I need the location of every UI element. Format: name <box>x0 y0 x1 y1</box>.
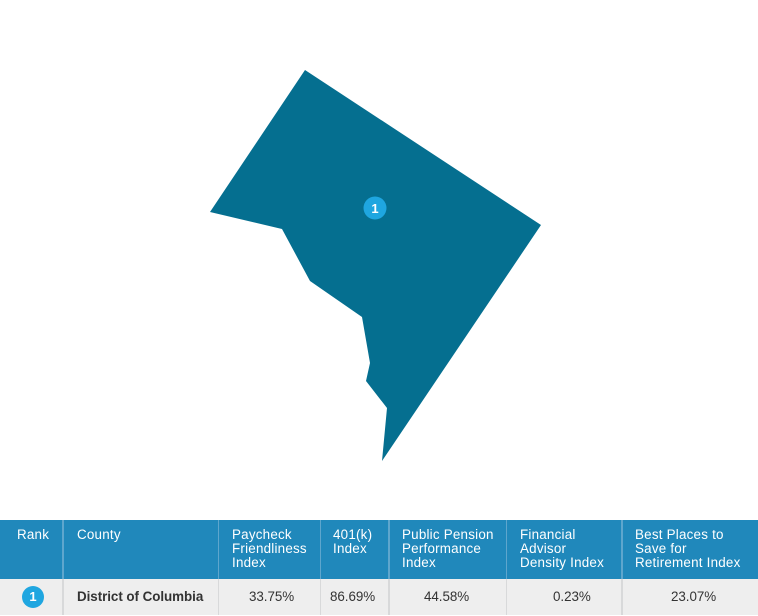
rank badge <box>22 586 44 608</box>
header: financial advisor <box>520 526 604 570</box>
header: paycheck friendliness <box>232 526 307 570</box>
header: rank: Rank <box>17 526 49 542</box>
header: financial advisor: Advisor <box>520 540 566 556</box>
county shape <box>210 70 541 461</box>
header: best places: Retirement Index <box>635 554 740 570</box>
header: best places: Best Places to <box>635 526 724 542</box>
best places value: 23.07% <box>671 589 716 604</box>
header: best places <box>635 526 740 570</box>
header: financial advisor: Density Index <box>520 554 604 570</box>
pension value: 44.58% <box>424 589 469 604</box>
table row: District of Columbia <box>0 579 758 615</box>
header: paycheck friendliness: Index <box>232 554 266 570</box>
advisor value: 0.23% <box>553 589 591 604</box>
header: public pension <box>402 526 494 570</box>
header: paycheck friendliness: Friendliness <box>232 540 307 556</box>
ranking table <box>0 520 758 615</box>
header: public pension: Index <box>402 554 436 570</box>
header: best places: Save for <box>635 540 687 556</box>
header: paycheck friendliness: Paycheck <box>232 526 292 542</box>
header: public pension: Performance <box>402 540 481 556</box>
header: 401(k) <box>333 526 372 556</box>
map marker: rank 1 <box>364 196 386 220</box>
county name: District of Columbia <box>77 589 203 604</box>
header: financial advisor: Financial <box>520 526 576 542</box>
header: public pension: Public Pension <box>402 526 494 542</box>
header: county: County <box>77 526 121 542</box>
header: 401(k): 401(k) <box>333 526 372 542</box>
header: 401(k): Index <box>333 540 367 556</box>
paycheck value: 33.75% <box>249 589 294 604</box>
rank badge: 1 <box>29 589 37 604</box>
401k value: 86.69% <box>330 589 375 604</box>
table header <box>0 520 758 579</box>
map marker: rank 1: 1 <box>371 201 379 216</box>
